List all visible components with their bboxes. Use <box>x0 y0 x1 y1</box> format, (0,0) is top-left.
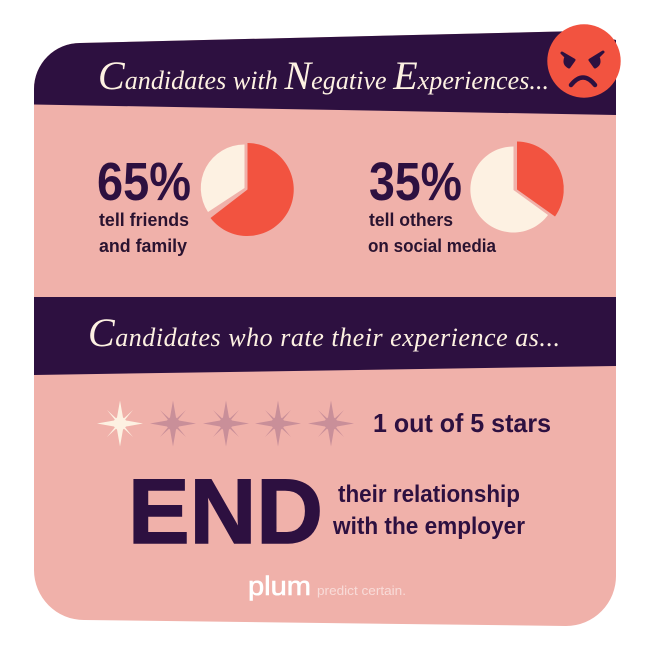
number: 35%: 35% <box>369 152 462 212</box>
caption: tell others on social media: tell others <box>369 210 453 230</box>
caption: tell friends and family: and family <box>99 236 187 256</box>
label: 1 out of 5 stars: 1 out of 5 stars <box>373 408 551 438</box>
number: 65%: 65% <box>97 152 191 212</box>
pie chart: 65 percent <box>201 143 294 236</box>
heading: candidates with negative experiences: Candidates with Negative Experiences... <box>98 53 549 98</box>
text: their relationship with the employer: their relationship <box>338 481 520 508</box>
icon: empty star 5 <box>308 400 354 446</box>
icon: empty star 3 <box>203 400 249 446</box>
panel: top heading band <box>34 31 616 115</box>
icon: angry face <box>547 24 621 98</box>
caption: tell others on social media: on social media <box>368 236 497 256</box>
logo: plum predict certain: predict certain. <box>317 583 406 598</box>
text: their relationship with the employer: with the employer <box>332 513 525 540</box>
panel: second heading band <box>34 297 616 375</box>
icon: empty star 4 <box>255 400 301 446</box>
logo: plum predict certain <box>248 571 406 601</box>
logo: plum predict certain: plum <box>248 571 311 601</box>
icon: empty star 2 <box>150 400 196 446</box>
caption: tell friends and family: tell friends <box>99 210 189 230</box>
pie chart: 35 percent <box>470 142 564 232</box>
rating: five stars <box>97 400 354 446</box>
heading: candidates who rate their experience as: Candidates who rate their experience as... <box>88 310 560 355</box>
icon: filled star <box>97 400 143 446</box>
headline word: END: END <box>128 461 323 563</box>
stat: 65 percent <box>97 152 191 256</box>
stat: 35 percent <box>368 152 497 256</box>
